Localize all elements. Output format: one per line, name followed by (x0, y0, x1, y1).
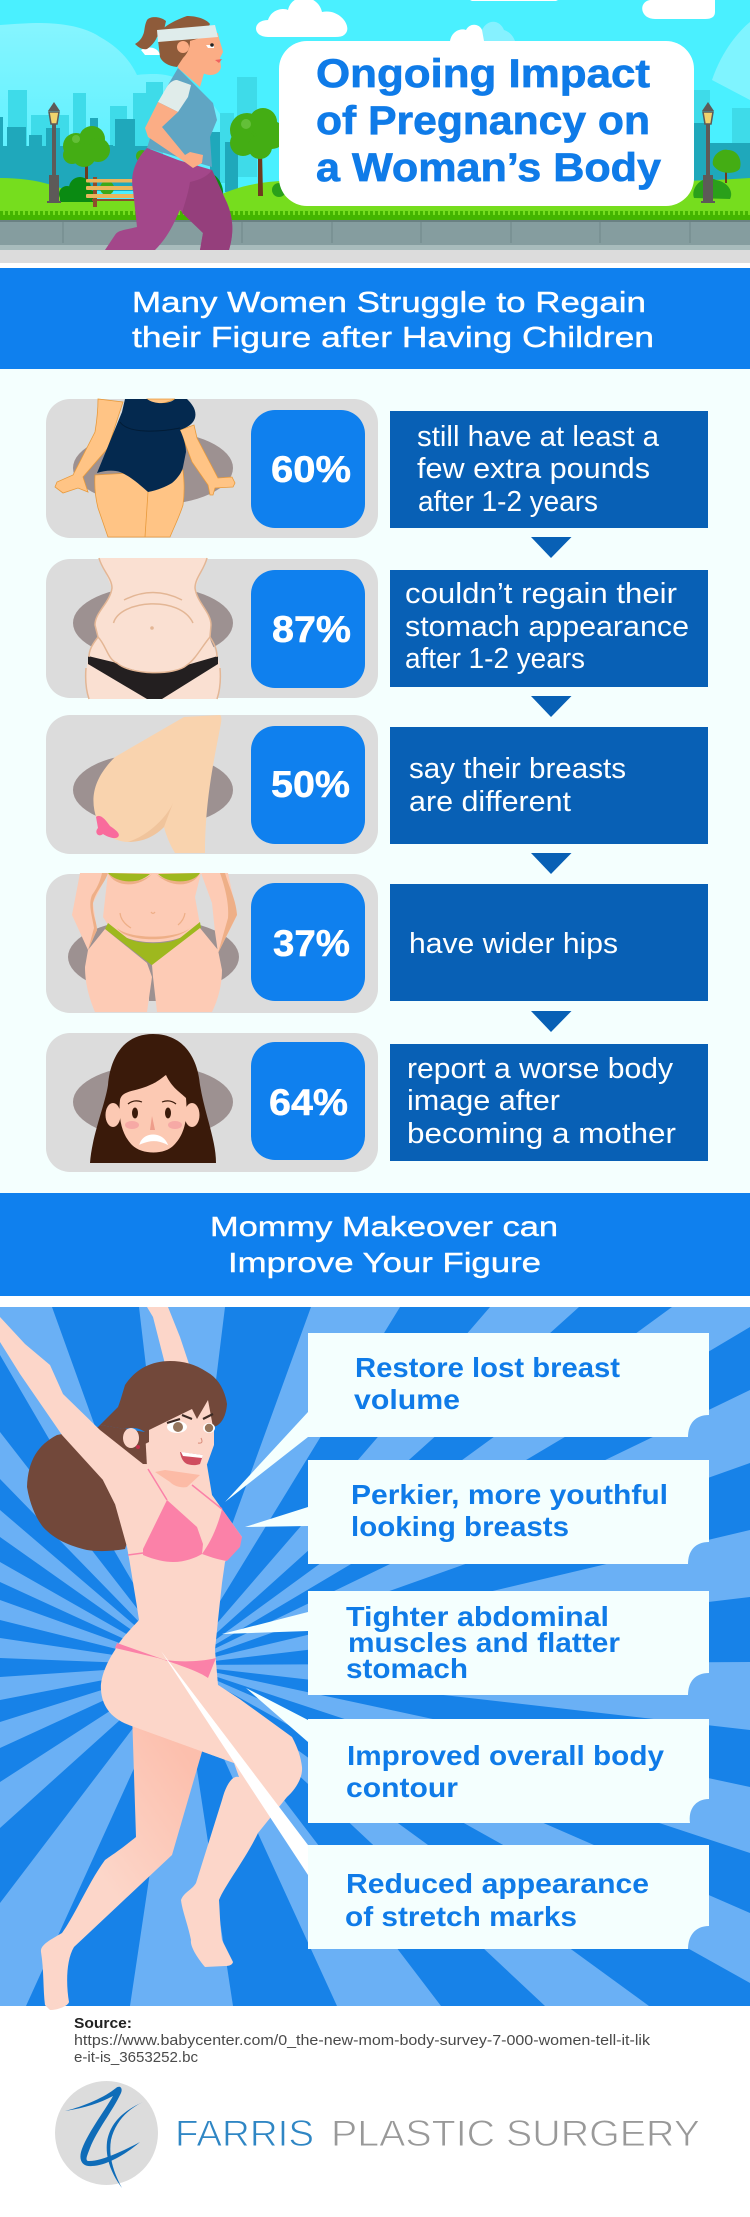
arrow (531, 696, 572, 717)
logo wordmark (175, 2113, 700, 2154)
source: e-it-is_3653252.bc (74, 2049, 198, 2066)
heading band: many women struggle: their Figure after Having Children (132, 322, 654, 354)
description box: report a worse body (407, 1053, 674, 1085)
stat row: 87%: 87% (272, 609, 351, 650)
callout: reduced stretch marks (161, 1651, 709, 1949)
vest (147, 68, 217, 167)
description box: have wider hips (409, 928, 618, 960)
description box (390, 1044, 708, 1161)
stat row: 87% (46, 558, 708, 717)
percent box (251, 1042, 365, 1160)
heading band: many women struggle (0, 268, 750, 369)
ear (177, 41, 189, 53)
source: https://www.babycenter.com/0_the-new-mom-body-survey-7-000-women-tell-it-lik (74, 2032, 651, 2049)
right arm (201, 873, 237, 953)
lamp post right (701, 102, 715, 203)
figure: breast (93, 715, 221, 853)
percent box (251, 726, 365, 844)
description box (390, 884, 708, 1001)
logo mark (55, 2081, 158, 2188)
heading band: mommy makeover: Mommy Makeover can (210, 1211, 558, 1242)
ear (123, 1428, 139, 1448)
woman in pink bikini (0, 1307, 302, 2010)
percent box (251, 410, 365, 528)
front leg (129, 1685, 302, 1967)
callout: perkier breasts: Perkier, more youthful (351, 1479, 668, 1510)
description box (390, 570, 708, 687)
stat row: 64%: 64% (269, 1082, 348, 1123)
stat row: 60% (46, 399, 708, 558)
description box: still have at least a (417, 421, 660, 453)
description box: stomach appearance (405, 611, 689, 643)
jogging woman (105, 16, 232, 250)
stat row: 37%: 37% (273, 923, 350, 964)
lamp post left (47, 102, 61, 203)
description box: after 1-2 years (405, 643, 585, 675)
raised arm behind head (147, 1307, 189, 1364)
torso (103, 873, 201, 942)
stat row: 50% (46, 715, 708, 874)
callout: improved body contour: Improved overall body (347, 1740, 664, 1771)
belly fold (117, 928, 190, 939)
source: Source: (74, 2015, 132, 2032)
bush (59, 177, 96, 202)
description box: couldn’t regain their (405, 578, 677, 610)
torso and hip (101, 1464, 270, 1763)
bikini bottom (105, 922, 201, 966)
face (170, 33, 223, 75)
header illustration: park scene (0, 0, 750, 263)
title text: Ongoing Impact (316, 52, 650, 96)
sleeve (158, 80, 191, 112)
rear pant leg (182, 170, 232, 250)
thighs (85, 928, 222, 1012)
title text (316, 52, 662, 190)
hair (158, 16, 210, 67)
description box: are different (409, 786, 571, 818)
bikini top (108, 873, 200, 882)
bikini top (128, 1469, 242, 1562)
title text: of Pregnancy on (316, 99, 650, 143)
bench (86, 177, 137, 207)
heading band: mommy makeover (0, 1193, 750, 1296)
neck (178, 55, 205, 87)
callout: reduced stretch marks: Reduced appearance (346, 1868, 649, 1899)
back hair (27, 1425, 150, 1551)
figure: swimsuit torso (55, 399, 235, 537)
city skyline (8, 77, 750, 186)
mouth (180, 1452, 203, 1465)
left arm (72, 873, 108, 950)
heading band: many women struggle: Many Women Struggle to Regain (132, 287, 646, 319)
arm and fist (145, 102, 203, 168)
figure: stomach (86, 558, 220, 699)
face (145, 1398, 214, 1475)
statistics panel (0, 369, 750, 1193)
bikini bottom (115, 1643, 216, 1678)
sunburst background (0, 1307, 750, 2006)
description box: image after (407, 1085, 560, 1117)
top hair (100, 1361, 227, 1444)
description box (390, 727, 708, 844)
callout: tighter abdominal muscles: muscles and flatter (348, 1627, 620, 1658)
eye and lips (206, 43, 222, 63)
description box: say their breasts (409, 753, 626, 785)
background hills (0, 22, 750, 180)
arrow (531, 853, 572, 874)
clouds (141, 0, 715, 55)
description box: few extra pounds (417, 453, 650, 485)
callout: improved body contour: contour (346, 1772, 458, 1803)
percent box (251, 570, 365, 688)
tree left (63, 126, 110, 180)
title card (279, 41, 694, 206)
logo wordmark: FARRIS (175, 2113, 314, 2154)
arrow (531, 537, 572, 558)
description box: after 1-2 years (418, 486, 598, 518)
grass (0, 178, 750, 217)
logo: Farris Plastic Surgery (55, 2081, 700, 2188)
ponytail (135, 17, 166, 49)
callout: perkier breasts: looking breasts (351, 1511, 569, 1542)
source (74, 2015, 651, 2066)
description box (390, 411, 708, 528)
callout: restore lost breast volume: Restore lost breast (355, 1352, 620, 1383)
tree right (693, 150, 740, 199)
percent box (251, 883, 365, 1001)
back leg (41, 1712, 206, 2010)
eyes (167, 1414, 215, 1443)
callout: perkier breasts (245, 1460, 709, 1564)
callout: tighter abdominal muscles (222, 1591, 709, 1695)
callout: restore lost breast volume (225, 1333, 709, 1502)
callout: improved body contour (246, 1688, 709, 1823)
callout: restore lost breast volume: volume (354, 1384, 460, 1415)
figure: hips (72, 873, 237, 1012)
stat row: 60%: 60% (271, 449, 351, 490)
raised arm (0, 1317, 150, 1504)
neck shadow (155, 1470, 200, 1487)
bushes behind woman (136, 150, 286, 197)
sidewalk (0, 220, 750, 250)
headband (157, 25, 218, 42)
figure: worried face (90, 1034, 216, 1163)
pants (105, 148, 232, 250)
heading band: mommy makeover: Improve Your Figure (228, 1247, 541, 1278)
callout: tighter abdominal muscles: Tighter abdominal (346, 1601, 609, 1632)
arrow (531, 1011, 572, 1032)
callout: reduced stretch marks: of stretch marks (345, 1901, 577, 1932)
title text: a Woman’s Body (316, 146, 662, 190)
logo wordmark: PLASTIC SURGERY (331, 2113, 700, 2154)
stat row: 37% (46, 873, 708, 1032)
stat row: 50%: 50% (271, 764, 350, 805)
description box: becoming a mother (407, 1118, 676, 1150)
stat row: 64% (46, 1033, 708, 1172)
tree centre (230, 108, 286, 196)
callout: tighter abdominal muscles: stomach (346, 1653, 468, 1684)
